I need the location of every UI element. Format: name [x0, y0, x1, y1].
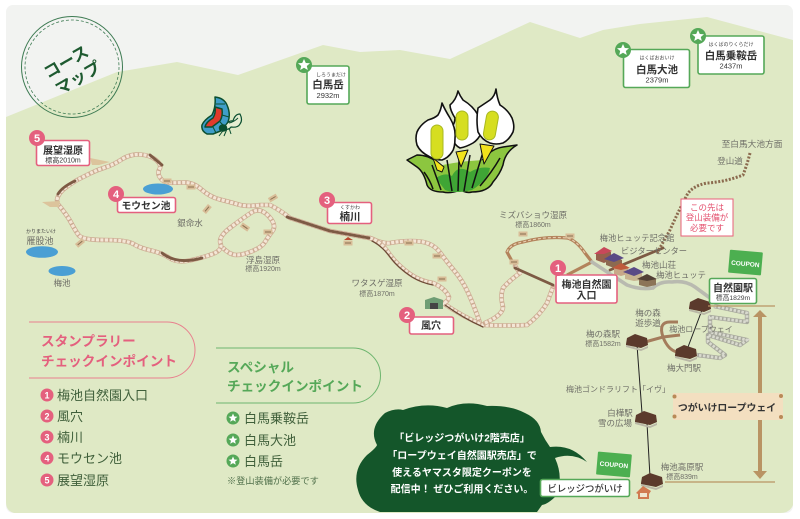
label: Hakuba Norikura-dake: 白馬乗鞍岳: [705, 49, 757, 62]
label: Shirouma-dake: 白馬岳: [312, 78, 344, 91]
leaves: [407, 144, 517, 193]
label: point 5: 標高2010m: [45, 156, 81, 164]
stamp rally heading: [29, 322, 195, 378]
map text labels: 梅池ロープウェイ: [669, 324, 733, 334]
Ume-no-mori promenade: [645, 322, 680, 352]
coupon tag: top: COUPON: [731, 260, 760, 269]
map text labels: 浮島湿原: [246, 255, 280, 265]
map text labels: 梅池ヒュッテ記念館: [600, 233, 674, 243]
title badge: course map: マップ: [52, 57, 105, 99]
village houses: [594, 247, 657, 287]
label: Shirouma-dake: しろうまだけ: [316, 72, 346, 78]
map text labels: ビジターセンター: [621, 246, 687, 256]
title badge: course map: コース: [41, 43, 92, 83]
label: Hakuba Oike: はくばおおいけ: [639, 54, 675, 62]
map text labels: 遊歩道: [635, 318, 661, 328]
wooden sign: Tsugaike Ropeway: [672, 393, 783, 420]
stamp rally list: 風穴: [57, 409, 83, 424]
label: Shizenen station: 標高1829m: [716, 293, 751, 302]
trail to mountain: [657, 153, 750, 253]
stamp rally list: 4: [44, 454, 50, 464]
label: Shirouma-dake: 2932m: [317, 91, 339, 100]
label: point 1: 入口: [576, 290, 596, 302]
map text labels: 雁股池: [26, 235, 54, 246]
spathes: [416, 89, 514, 160]
map text labels: 標高1920m: [245, 264, 281, 273]
label: Hakuba Norikura-dake: 2437m: [720, 62, 742, 70]
label: point 2: 2: [404, 310, 410, 322]
label: Shirouma-dake: [296, 57, 349, 104]
map text labels: 梅大門駅: [667, 363, 701, 373]
special list: 白馬大池: [244, 433, 296, 448]
map text labels: 梅池ヒュッテ: [656, 270, 706, 280]
brown sections: [58, 155, 553, 285]
label: Hakuba Oike: [615, 42, 690, 88]
map text labels: 梅池ゴンドラリフト「イヴ」: [566, 384, 670, 394]
label: point 3: 3: [324, 195, 330, 207]
map text labels: 白樺駅: [607, 408, 633, 418]
panel: stamp rally checkpoints: [29, 322, 195, 488]
stamp rally list: 3: [44, 432, 50, 442]
warning box: 登山装備が: [686, 212, 729, 222]
callout speech cloud: 「ビレッジつがいけ2階売店」: [394, 432, 530, 444]
label: point 5: 展望湿原: [43, 144, 83, 157]
brown walkway to visitor center: [610, 248, 663, 270]
label: Hakuba Norikura-dake: [690, 28, 764, 74]
coupon tag: bottom: COUPON: [599, 461, 629, 470]
callout speech cloud: 配信中！ ぜひご利用ください。: [391, 482, 533, 496]
panel: special checkpoints: [216, 348, 380, 486]
callout speech cloud: 使えるヤマスタ限定クーポンを: [392, 466, 532, 479]
ropeway stations and cables: [626, 298, 711, 499]
icon: wind cave: [425, 297, 443, 309]
label: point 2: 風穴: [421, 319, 441, 332]
special list: [226, 411, 319, 486]
stamp rally heading: スタンプラリー: [41, 334, 136, 349]
warning box: 必要です: [690, 223, 724, 233]
map text labels: 標高1870m: [359, 289, 395, 298]
label: Shizenen station: [710, 278, 756, 304]
label: point 1: [550, 260, 617, 303]
label: point 3: [319, 192, 372, 224]
map text labels: 至白馬大池方面: [722, 138, 783, 149]
map text labels: 標高1860m: [515, 220, 551, 229]
label: Shizenen station: 自然園駅: [713, 282, 753, 294]
label: Village Tsugaike: [540, 480, 630, 496]
stamp rally list: 楠川: [57, 430, 83, 445]
grey trail east of ropeway: [697, 306, 747, 358]
stamp rally list: [40, 388, 148, 488]
label: point 1: 梅池自然園: [562, 278, 612, 291]
label: point 3: 楠川: [340, 210, 360, 223]
coupon tag: bottom: [596, 452, 632, 477]
special heading: チェックインポイント: [227, 379, 363, 394]
butterfly icon: [202, 97, 242, 136]
map text labels: [26, 138, 783, 481]
map text labels: 梅池: [53, 278, 71, 288]
label: Hakuba Norikura-dake: はくばのりくらだけ: [708, 41, 754, 48]
map text labels: 銀命水: [177, 218, 203, 228]
height arrow: [665, 306, 775, 482]
label: point 4: 4: [113, 189, 120, 201]
Mizubasho loop: [507, 238, 592, 275]
special list: ※登山装備が必要です: [227, 475, 319, 486]
callout speech cloud: [356, 403, 587, 512]
stamp rally list: モウセン池: [57, 451, 122, 466]
special heading: スペシャル: [227, 360, 294, 375]
map text labels: ミズバショウ湿原: [499, 210, 567, 220]
warning box: この先は: [690, 202, 724, 212]
label: Hakuba Oike: 2379m: [646, 76, 668, 84]
coupon tag: top: [728, 250, 763, 275]
map text labels: 梅池高原駅: [661, 462, 704, 472]
stamp rally list: 梅池自然園入口: [57, 388, 148, 403]
map text labels: ワタスゲ湿原: [351, 278, 403, 288]
map text labels: 標高1582m: [585, 339, 621, 348]
label: point 5: [29, 130, 90, 166]
label: point 4: モウセン池: [122, 199, 171, 212]
spadices: [431, 110, 499, 159]
boardwalk network: [57, 154, 553, 326]
map text labels: 標高839m: [666, 472, 698, 481]
title badge: course map: [22, 16, 122, 118]
boardwalk signs and viewing decks: [42, 158, 574, 282]
special list: 白馬岳: [244, 454, 283, 469]
label: point 3: くすかわ: [340, 204, 360, 211]
special list: 白馬乗鞍岳: [244, 411, 309, 426]
map text labels: 梅の森: [635, 308, 661, 318]
label: point 2: [399, 307, 454, 334]
map text labels: 梅池山荘: [642, 260, 676, 270]
map text labels: 梅の森駅: [586, 329, 620, 339]
stamp rally heading: チェックインポイント: [41, 354, 177, 369]
callout speech cloud: 「ロープウェイ自然園駅売店」で: [387, 449, 537, 462]
map text labels: かりまたいけ: [26, 228, 56, 235]
label: Village Tsugaike: ビレッジつがいけ: [547, 483, 623, 494]
trails: [57, 153, 750, 358]
warning box: [681, 199, 733, 236]
map text labels: 登山道: [717, 156, 743, 166]
label: point 4: [108, 186, 176, 212]
label: point 1: 1: [555, 263, 561, 275]
label: point 5: 5: [34, 133, 40, 145]
stamp rally list: 5: [44, 476, 50, 486]
map text labels: 雪の広場: [598, 418, 632, 428]
special heading: [216, 348, 380, 403]
grey road: [592, 262, 710, 298]
skunk cabbage illustration: [407, 89, 517, 193]
stamp rally list: 2: [44, 412, 50, 422]
label: Hakuba Oike: 白馬大池: [636, 63, 678, 76]
stamp rally list: 1: [44, 390, 50, 400]
ponds: [26, 184, 173, 276]
stamp rally list: 展望湿原: [57, 473, 109, 488]
wooden sign: Tsugaike Ropeway: つがいけロープウェイ: [678, 401, 776, 414]
